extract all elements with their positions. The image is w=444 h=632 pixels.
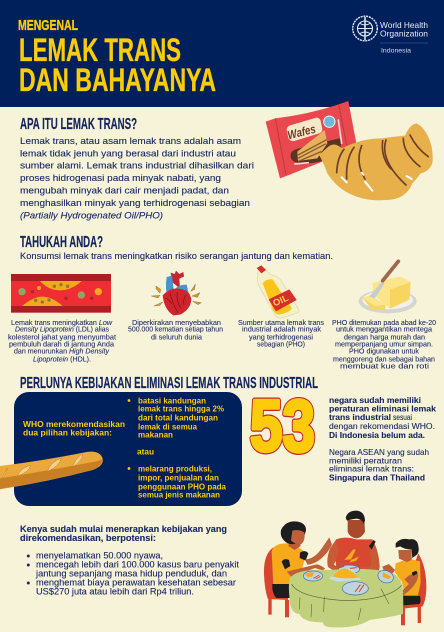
list: policy options: penggunaan PHO pada: [138, 482, 227, 491]
text: butter caption: [332, 318, 436, 371]
list: policy options: lemak di semua: [138, 422, 198, 431]
text block: Kenya benefits: menghemat biaya perawatan kesehatan sebesar: [36, 577, 236, 587]
text: artery caption: kolesterol jahat yang menyumbat: [8, 332, 117, 341]
text block: Kenya benefits: Kenya sudah mulai menerapkan kebijakan yang: [20, 524, 227, 534]
list: policy options: [128, 396, 227, 500]
text block: 53 countries explanation: Di Indonesia belum ada.: [329, 431, 425, 440]
heading: tahukah anda: TAHUKAH ANDA?: [20, 234, 103, 251]
text block: definition: lemak tidak jenuh yang berasal dari industri atau: [20, 147, 236, 158]
text: butter caption: untuk menggantikan mentega: [336, 325, 433, 334]
text: oil caption: [238, 318, 324, 349]
text: butter caption: PHO digunakan untuk: [349, 346, 419, 356]
header band: [0, 0, 444, 107]
text: butter caption: memperpanjang umur simpan.: [335, 340, 433, 349]
text: oil caption: Sumber utama lemak trans: [238, 318, 324, 327]
text: oil caption: industrial adalah minyak: [242, 325, 321, 334]
list: policy options: semua jenis makanan: [138, 491, 220, 500]
right girl: [382, 539, 421, 605]
text: butter caption: PHO ditemukan pada abad ke-20: [332, 318, 436, 327]
text: risk statement: Konsumsi lemak trans meningkatkan risiko serangan jantung dan kematian.: [20, 251, 333, 261]
big number: 53 countries: 53: [250, 386, 315, 467]
text: butter caption: membuat kue dan roti: [340, 362, 429, 371]
icon: oil bottle: OIL: [271, 293, 290, 308]
text block: 53 countries explanation: memiliki peraturan: [329, 456, 402, 465]
icon: baguette: [0, 452, 103, 489]
text: butter caption: menggoreng dan sebagai bahan: [333, 354, 435, 363]
text: artery caption: pembuluh darah di jantung Anda: [9, 340, 115, 349]
text block: 53 countries explanation: dengan rekomendasi WHO.: [329, 422, 435, 431]
title: MENGENAL: [18, 17, 78, 34]
text block: 53 countries explanation: eliminasi lemak trans:: [329, 464, 414, 473]
text: oil caption: sebagian (PHO): [257, 340, 305, 349]
list: policy options: dari total kandungan: [138, 414, 218, 423]
list: policy options: atau: [137, 448, 154, 457]
text: artery caption: [8, 318, 117, 363]
left woman: [272, 521, 332, 598]
title: [18, 17, 216, 98]
list: policy options: batasi kandungan: [138, 396, 206, 405]
text block: 53 countries explanation: trans industrial: [329, 413, 391, 422]
text block: 53 countries explanation: sesuai: [393, 413, 412, 422]
text: heart caption: [128, 318, 223, 341]
logo: World Health Organization Indonesia: World Health: [380, 20, 428, 30]
heading: apa itu lemak trans: APA ITU LEMAK TRANS?: [20, 116, 137, 133]
text: recommendation intro: dua pilihan kebijakan:: [23, 428, 112, 438]
title: LEMAK TRANS: [19, 32, 181, 68]
title: DAN BAHAYANYA: [19, 62, 216, 98]
icon: oil bottle: [257, 265, 299, 318]
text block: 53 countries explanation: [329, 396, 437, 482]
text block: Kenya benefits: mencegah lebih dari 100.000 kasus baru penyakit: [36, 559, 239, 569]
text block: definition: sumber alami. Lemak trans industrial dihasilkan dari: [20, 160, 254, 171]
text block: Kenya benefits: [20, 524, 239, 596]
text block: Kenya benefits: direkomendasikan, berpotensi:: [20, 533, 156, 543]
text block: Kenya benefits: jantung sepanjang masa hidup penduduk, dan: [35, 568, 227, 578]
centre man: [327, 511, 380, 574]
list: policy options: melarang produksi,: [138, 464, 212, 473]
logo: World Health Organization Indonesia: Indonesia: [381, 48, 411, 54]
plates and food: [303, 565, 395, 595]
text: heart caption: 500.000 kematian setiap tahun: [128, 325, 223, 334]
text block: definition: Lemak trans, atau asam lemak trans adalah asam: [20, 135, 241, 146]
panel: WHO recommendations: [14, 392, 242, 506]
logo: World Health Organization Indonesia: [353, 16, 428, 54]
icon: clogged artery: [11, 274, 111, 313]
text: heart caption: di seluruh dunia: [151, 332, 203, 341]
text block: definition: menghasilkan minyak yang terhidrogenasi sebagian: [20, 197, 250, 208]
text: artery caption: Lipoprotein (HDL).: [33, 354, 91, 363]
icon: heart: [151, 271, 201, 315]
big number: 53 countries: 53: [250, 386, 315, 467]
text block: Kenya benefits: US$270 juta atau lebih dari Rp4 triliun.: [36, 586, 194, 596]
text: artery caption: Density Lipoprotein (LDL) alias: [15, 325, 109, 334]
text: butter caption: dengan harga murah dan: [344, 332, 425, 341]
text block: Kenya benefits: menyelamatkan 50.000 nyawa,: [36, 550, 163, 560]
text block: definition: [20, 135, 254, 221]
logo: World Health Organization Indonesia: Organization: [380, 28, 428, 38]
text: recommendation intro: [23, 420, 125, 438]
text block: definition: mengubah minyak dari cair menjadi padat, dan: [20, 185, 229, 196]
text: oil caption: yang terhidrogenasi: [249, 332, 313, 341]
text: heart caption: Diperkirakan menyebabkan: [132, 318, 221, 327]
chairs: [264, 547, 426, 625]
text block: 53 countries explanation: Singapura dan Thailand: [329, 473, 425, 482]
illustration: wafer pack and croissant: [266, 101, 433, 200]
text block: 53 countries explanation: peraturan eliminasi lemak: [329, 404, 437, 413]
text: artery caption: Lemak trans meningkatkan Low: [11, 318, 112, 327]
illustration: wafer pack and croissant: Wafes: [286, 122, 317, 142]
text block: 53 countries explanation: Negara ASEAN yang sudah: [329, 448, 429, 457]
text: artery caption: dan menurunkan High Density: [14, 346, 110, 356]
text block: 53 countries explanation: negara sudah memiliki: [329, 396, 421, 405]
icon: butter and knife: [359, 261, 417, 313]
text block: definition: proses hidrogenasi pada minyak nabati, yang: [20, 172, 221, 183]
text block: definition: (Partially Hydrogenated Oil/PHO): [20, 210, 163, 221]
list: policy options: impor, penjualan dan: [138, 474, 219, 483]
list: policy options: makanan: [138, 431, 173, 440]
text: recommendation intro: WHO merekomendasikan: [23, 420, 125, 429]
table: [289, 569, 403, 627]
list: policy options: lemak trans hingga 2%: [138, 404, 224, 414]
illustration: family eating at table: [264, 511, 426, 627]
